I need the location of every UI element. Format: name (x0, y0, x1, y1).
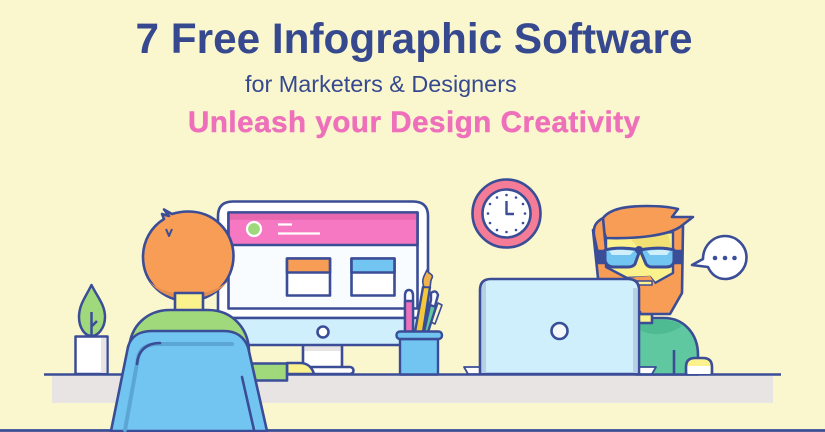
arm and hand (287, 363, 314, 374)
laptop (464, 279, 656, 374)
subtitle: for Marketers & Designers (245, 71, 517, 97)
speech bubble (692, 236, 746, 279)
neck (175, 293, 203, 311)
icon: clock (472, 180, 540, 248)
person at left (111, 210, 354, 431)
monitor stand (303, 345, 342, 368)
head (143, 210, 234, 301)
tagline: Unleash your Design Creativity (188, 106, 641, 139)
body (636, 318, 698, 374)
monitor (218, 202, 428, 368)
person at right (593, 206, 712, 374)
face (606, 232, 673, 283)
beard (593, 226, 683, 314)
screen (228, 212, 418, 308)
title: 7 Free Infographic Software (136, 15, 693, 62)
sunglasses (597, 251, 682, 263)
pens (431, 303, 442, 324)
card: blue (352, 258, 394, 296)
shoulders (129, 310, 249, 350)
hair (602, 206, 693, 238)
collar (636, 314, 652, 323)
keyboard (300, 367, 354, 374)
icon: plant (76, 285, 108, 374)
chair (111, 331, 267, 431)
desk (0, 374, 825, 430)
pen holder (396, 270, 442, 374)
card: orange (287, 258, 330, 296)
hand (686, 358, 712, 374)
screen header (228, 212, 418, 245)
mouth (626, 276, 655, 292)
cup (400, 339, 438, 374)
